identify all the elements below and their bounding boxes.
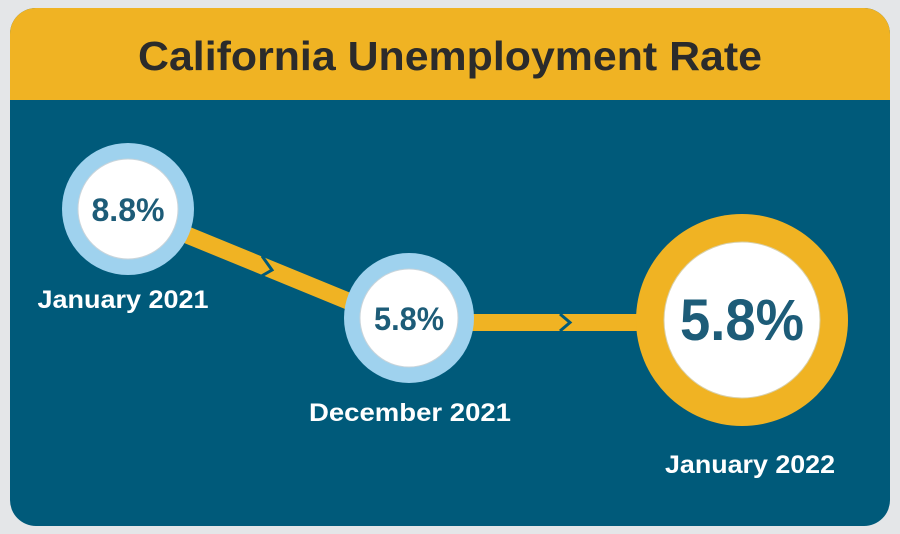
circle: December 2021: 5.8% [374, 301, 444, 337]
circle: January 2022 [636, 214, 848, 426]
connector: diagonal [170, 228, 365, 308]
label: January 2022: January 2022 [665, 451, 835, 479]
label: January 2021: January 2021 [38, 286, 209, 314]
label: December 2021: December 2021 [309, 399, 511, 427]
circle: January 2021: 8.8% [92, 192, 164, 228]
connector: horizontal [465, 314, 655, 331]
header banner [10, 8, 890, 100]
circle: January 2021 [62, 143, 194, 275]
circle: December 2021 [344, 253, 474, 383]
title: California Unemployment Rate [138, 33, 762, 79]
circle: January 2022: 5.8% [680, 288, 804, 353]
